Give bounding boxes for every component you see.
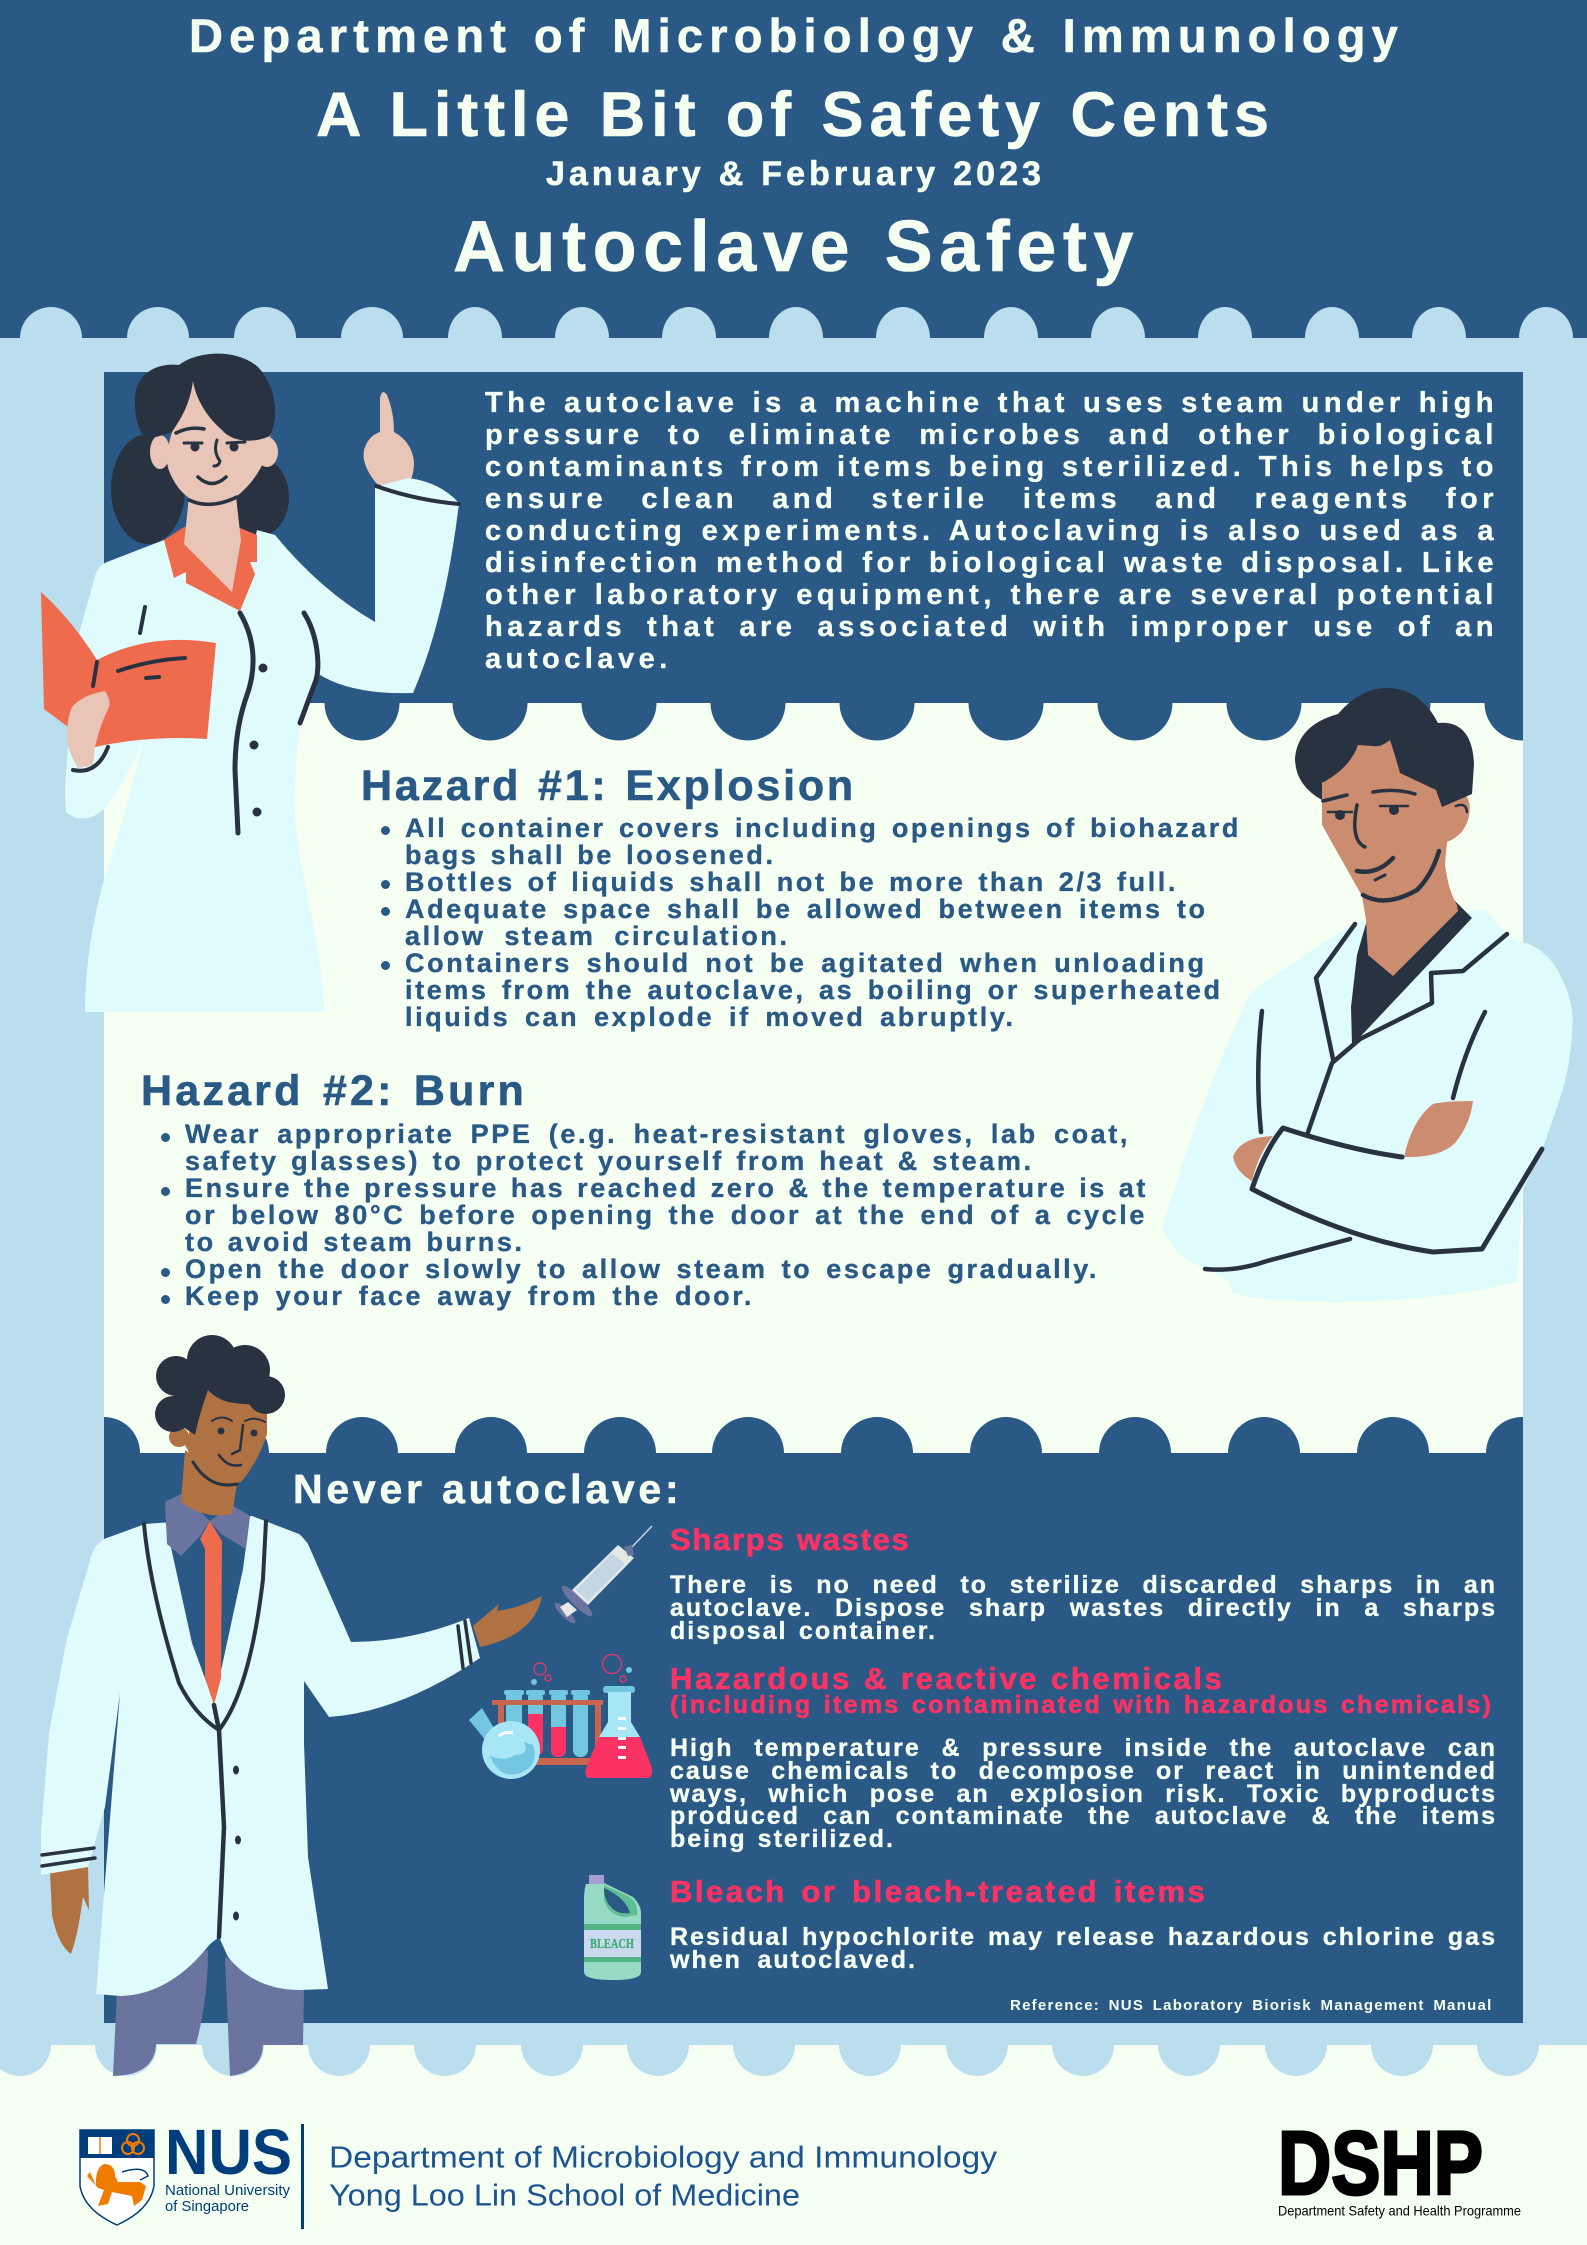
- text block: hazardous chemicals: ways, which pose an explosion risk. Toxic byproducts: [670, 1780, 1497, 1808]
- list: hazard 2 points: Open the door slowly to allow steam to escape gradually.: [185, 1254, 1099, 1284]
- heading: hazard 1: Hazard #1: Explosion: [361, 762, 856, 810]
- reference note: Reference: NUS Laboratory Biorisk Management Manual: [1010, 1997, 1492, 2014]
- text block: introduction: other laboratory equipment, there are several potential: [485, 579, 1498, 611]
- heading: never autoclave: Never autoclave:: [293, 1466, 682, 1512]
- subheading: sharps wastes: Sharps wastes: [670, 1522, 910, 1557]
- text block: introduction: autoclave.: [485, 643, 672, 675]
- list: hazard 2 points: to avoid steam burns.: [185, 1227, 525, 1257]
- list: hazard 1 points: All container covers including openings of biohazard: [405, 813, 1241, 843]
- title: series name: A Little Bit of Safety Cents: [316, 80, 1275, 150]
- title: date: January & February 2023: [546, 155, 1045, 193]
- panel: hazards background: [104, 703, 1523, 1463]
- logo: NUS: NUS: [165, 2116, 292, 2188]
- title: topic: Autoclave Safety: [453, 207, 1140, 287]
- list: hazard 2 points: Ensure the pressure has reached zero & the temperature is at: [185, 1173, 1148, 1203]
- icon: flasks and test tubes: [469, 1654, 652, 1779]
- text block: introduction: disinfection method for biological waste disposal. Like: [485, 547, 1498, 579]
- subheading: hazardous chemicals: Hazardous & reactive chemicals: [670, 1661, 1224, 1696]
- text block: introduction: hazards that are associated with improper use of an: [485, 611, 1498, 643]
- subheading: hazardous chemicals: [670, 1661, 1493, 1719]
- illustration: man pointing: [41, 1335, 542, 2076]
- text block: hazardous chemicals: being sterilized.: [670, 1825, 895, 1853]
- logo: NUS: [80, 2116, 304, 2229]
- subheading: bleach: Bleach or bleach-treated items: [670, 1874, 1207, 1909]
- title: department: Department of Microbiology & Immunology: [189, 9, 1404, 62]
- list: hazard 2 points: safety glasses) to protect yourself from heat & steam.: [185, 1146, 1034, 1176]
- panel: intro background: [66, 372, 1560, 740]
- list: hazard 1 points: [381, 813, 1241, 1032]
- text block: bleach: Residual hypochlorite may release hazardous chlorine gas: [670, 1923, 1497, 1951]
- logo: NUS: National University: [165, 2182, 290, 2199]
- text block: hazardous chemicals: cause chemicals to decompose or react in unintended: [670, 1757, 1497, 1785]
- text block: bleach: [670, 1923, 1497, 1974]
- text block: sharps wastes: There is no need to sterilize discarded sharps in an: [670, 1570, 1497, 1598]
- list: hazard 1 points: Bottles of liquids shall not be more than 2/3 full.: [405, 867, 1178, 897]
- logo: DSHP: DSHP: [1278, 2114, 1483, 2214]
- light blue frame with scalloped edges: [0, 307, 1587, 2076]
- logo: NUS: of Singapore: [165, 2198, 249, 2215]
- list: hazard 2 points: or below 80°C before opening the door at the end of a cycle: [185, 1200, 1147, 1230]
- list: hazard 1 points: Containers should not be agitated when unloading: [405, 948, 1207, 978]
- text block: introduction: ensure clean and sterile items and reagents for: [485, 483, 1498, 515]
- heading: hazard 2: Hazard #2: Burn: [141, 1067, 527, 1115]
- illustration: man with crossed arms: [1162, 688, 1573, 1302]
- panel: never autoclave background: [68, 1417, 1558, 2023]
- department footer text: Yong Loo Lin School of Medicine: [329, 2178, 800, 2213]
- list: hazard 1 points: liquids can explode if moved abruptly.: [405, 1002, 1016, 1032]
- text block: hazardous chemicals: produced can contaminate the autoclave & the items: [670, 1802, 1497, 1830]
- subheading: hazardous chemicals: (including items contaminated with hazardous chemicals): [670, 1691, 1493, 1719]
- list: hazard 1 points: allow steam circulation.: [405, 921, 790, 951]
- illustration: woman scientist with book: [41, 354, 459, 1012]
- logo: DSHP: Department Safety and Health Programme: [1278, 2203, 1521, 2219]
- text block: introduction: [485, 387, 1498, 675]
- list: hazard 2 points: Wear appropriate PPE (e.g. heat-resistant gloves, lab coat,: [185, 1119, 1130, 1149]
- department footer text: Department of Microbiology and Immunology: [329, 2140, 998, 2175]
- list: hazard 2 points: Keep your face away from the door.: [185, 1281, 754, 1311]
- text block: sharps wastes: disposal container.: [670, 1616, 937, 1644]
- list: hazard 1 points: bags shall be loosened.: [405, 840, 776, 870]
- text block: introduction: conducting experiments. Autoclaving is also used as a: [485, 515, 1498, 547]
- text block: hazardous chemicals: High temperature & pressure inside the autoclave can: [670, 1734, 1497, 1762]
- text block: introduction: contaminants from items being sterilized. This helps to: [485, 451, 1498, 483]
- header band: [0, 0, 1587, 338]
- text block: bleach: when autoclaved.: [670, 1946, 917, 1974]
- list: hazard 1 points: items from the autoclave, as boiling or superheated: [405, 975, 1223, 1005]
- icon: bleach bottle: [584, 1875, 641, 1980]
- icon: bleach bottle: BLEACH: [590, 1937, 634, 1952]
- text block: introduction: The autoclave is a machine that uses steam under high: [485, 387, 1498, 419]
- text block: hazardous chemicals: [670, 1734, 1497, 1853]
- list: hazard 1 points: Adequate space shall be allowed between items to: [405, 894, 1208, 924]
- text block: sharps wastes: autoclave. Dispose sharp wastes directly in a sharps: [670, 1594, 1497, 1622]
- icon: syringe: [552, 1526, 652, 1626]
- text block: introduction: pressure to eliminate microbes and other biological: [485, 419, 1498, 451]
- text block: sharps wastes: [670, 1570, 1497, 1644]
- list: hazard 2 points: [161, 1119, 1148, 1311]
- department footer text: [329, 2140, 998, 2213]
